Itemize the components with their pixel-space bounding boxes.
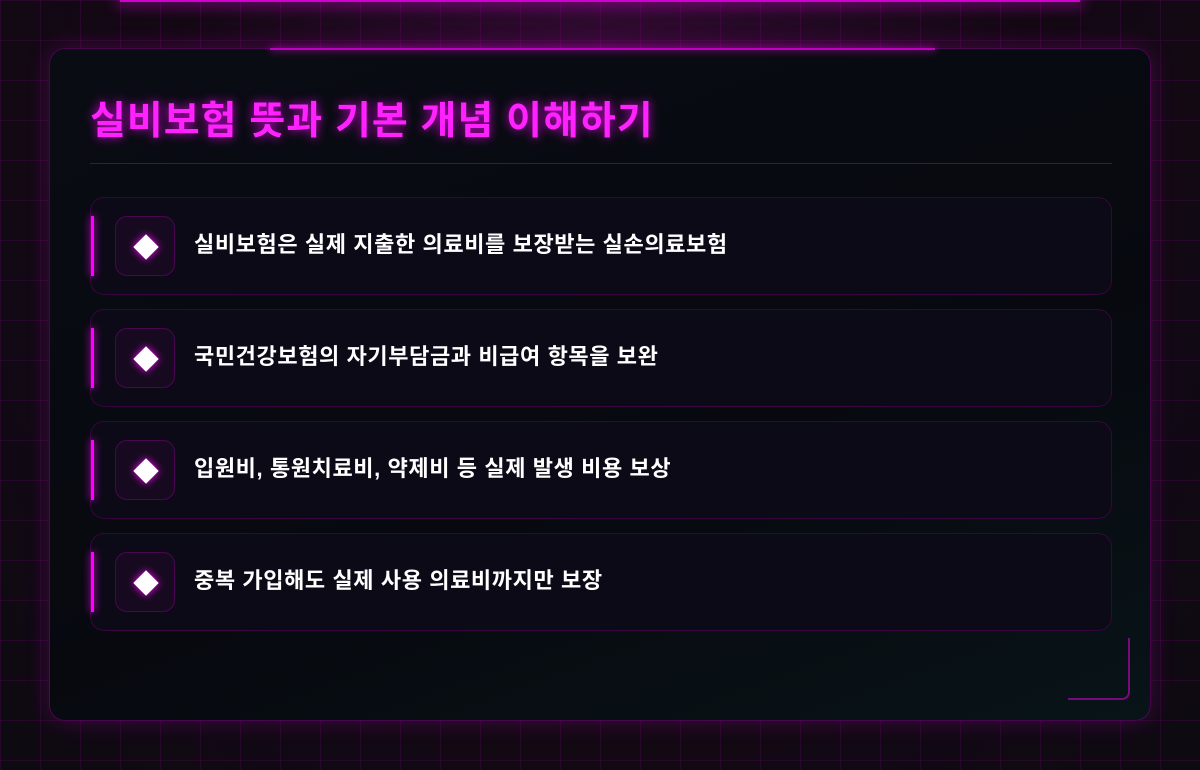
text 3: 입원비, 통원치료비, 약제비 등 실제 발생 비용 보상 [194, 456, 671, 481]
item 1 [90, 197, 1112, 295]
item 3 [90, 421, 1112, 519]
icon: diamond [115, 328, 175, 388]
icon: diamond [115, 216, 175, 276]
item 2 [90, 309, 1112, 407]
title: 실비보험 뜻과 기본 개념 이해하기 [90, 100, 654, 143]
text 2: 국민건강보험의 자기부담금과 비급여 항목을 보완 [194, 344, 658, 369]
decorative corner bracket [1068, 638, 1130, 700]
text 1: 실비보험은 실제 지출한 의료비를 보장받는 실손의료보험 [194, 232, 728, 257]
text 4: 중복 가입해도 실제 사용 의료비까지만 보장 [194, 568, 603, 593]
item 4 [90, 533, 1112, 631]
icon: diamond [115, 440, 175, 500]
icon: diamond [115, 552, 175, 612]
